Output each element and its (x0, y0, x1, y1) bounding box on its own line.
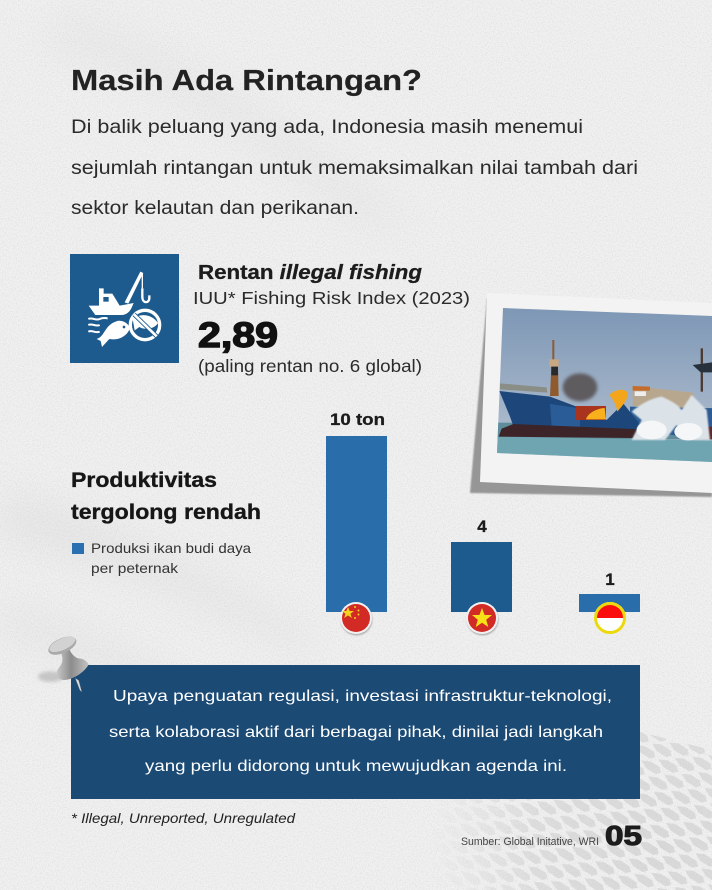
icon: fishing boat with no-fishing sign (70, 254, 179, 363)
rear hull (630, 406, 712, 436)
rail (500, 383, 547, 393)
bar: Vietnam 4: 4 (477, 517, 487, 536)
section heading: productivity: tergolong rendah (71, 501, 261, 524)
intro paragraph: sektor kelautan dan perikanan. (71, 198, 359, 219)
mast and funnel (552, 340, 554, 367)
value 2,89: 2,89 (198, 316, 278, 355)
intro paragraph (71, 117, 638, 219)
background water (493, 423, 712, 439)
callout box: serta kolaborasi aktif dari berbagai pihak, dinilai jadi langkah (109, 724, 603, 741)
callout box (71, 665, 640, 799)
intro paragraph: Di balik peluang yang ada, Indonesia masih menemui (71, 117, 583, 138)
main hull (499, 391, 642, 431)
bar: China 10 ton: 10 ton (330, 410, 385, 429)
rear superstructure (633, 386, 693, 408)
section heading: productivity (71, 469, 261, 524)
smoke (563, 373, 597, 401)
photo: burning fishing vessel (470, 293, 712, 497)
truss mast (701, 348, 703, 392)
heading: rentan illegal fishing: Rentan illegal fishing (198, 262, 422, 284)
title: Masih Ada Rintangan? (71, 65, 422, 97)
index label: IUU* Fishing Risk Index (2023) (193, 288, 470, 308)
bar: Indonesia 1: 1 (605, 570, 615, 589)
icon: push pin (38, 633, 89, 692)
legend: per peternak (91, 560, 179, 576)
callout box: yang perlu didorong untuk mewujudkan agenda ini. (145, 758, 567, 775)
illegal fishing stat (193, 262, 470, 376)
rank note: (paling rentan no. 6 global) (198, 356, 422, 376)
page number: 05 (605, 820, 642, 851)
bar: Indonesia 1 (579, 570, 640, 612)
footnote: * Illegal, Unreported, Unregulated (71, 810, 296, 826)
intro paragraph: sejumlah rintangan untuk memaksimalkan nilai tambah dari (71, 158, 638, 179)
bar: China 10 ton (326, 410, 387, 612)
legend (72, 540, 251, 576)
water spray (632, 395, 710, 440)
bar chart (326, 410, 640, 636)
icon: Indonesia flag (594, 602, 626, 634)
deck fire (576, 406, 606, 420)
legend: Produksi ikan budi daya (91, 540, 251, 556)
icon: China flag (340, 602, 372, 636)
section heading: productivity: Produktivitas (71, 469, 217, 492)
icon: Vietnam flag (466, 602, 498, 636)
bar: Vietnam 4 (451, 517, 512, 612)
source: Sumber: Global Initative, WRI (461, 836, 599, 848)
callout box: Upaya penguatan regulasi, investasi infrastruktur-teknologi, (113, 688, 612, 705)
